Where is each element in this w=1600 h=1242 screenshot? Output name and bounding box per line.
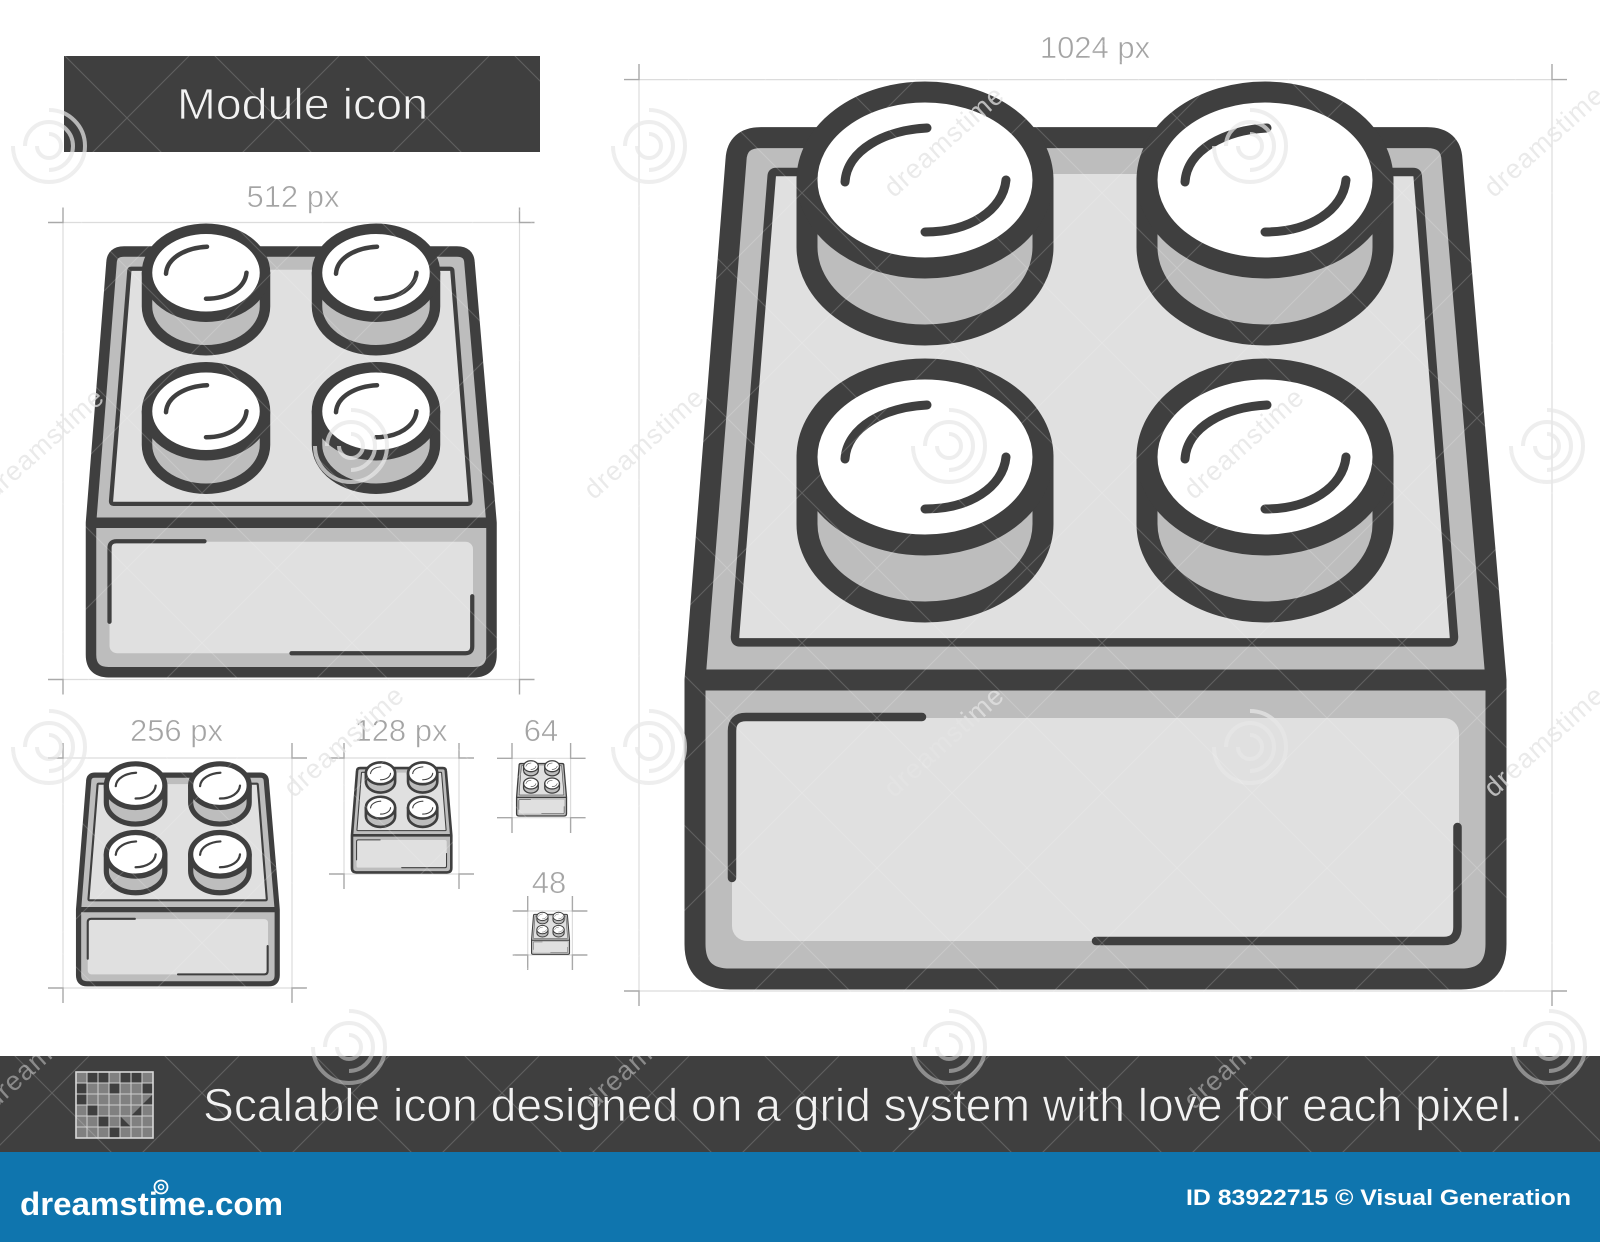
size label: 1024 px: 1024 px [1040, 30, 1151, 65]
guides: 128 px frame [329, 743, 474, 889]
guides: 512 px frame [48, 208, 534, 694]
title banner: Module icon [177, 80, 428, 129]
footer band [0, 1152, 1600, 1242]
title banner [64, 56, 540, 152]
size label: 64: 64 [524, 713, 558, 748]
guides: 1024 px frame [624, 64, 1567, 1006]
icon: pixel grid [76, 1072, 153, 1138]
footer credit: ID 83922715 © Visual Generation [1186, 1185, 1571, 1210]
caption text: Scalable icon designed on a grid system with love for each pixel. [203, 1079, 1523, 1131]
watermark spirals [13, 110, 1585, 1083]
caption bar [0, 1056, 1600, 1152]
size label: 128 px: 128 px [354, 713, 448, 748]
watermark text [0, 80, 1600, 803]
size label: 48: 48 [532, 865, 566, 900]
icon: module brick 1024 px [695, 92, 1496, 979]
guides: 48 px frame [513, 896, 587, 970]
watermark text: dreamstime [578, 382, 710, 505]
caption bar: dreamstime [1178, 992, 1310, 1115]
icon: module brick 48 px [532, 912, 570, 954]
guides: 256 px frame [48, 743, 307, 1003]
size label: 256 px: 256 px [130, 713, 224, 748]
caption bar: dreamstime [578, 992, 710, 1115]
guides: 64 px frame [497, 743, 586, 833]
size label: 512 px: 512 px [246, 179, 340, 214]
icon: module brick 512 px [91, 229, 492, 672]
icon: module brick 256 px [79, 764, 277, 984]
watermark text: dreamstime [878, 680, 1010, 803]
icon: module brick 64 px [517, 761, 567, 816]
watermark text: dreamstime [1178, 382, 1310, 505]
watermark text: dreamstime [278, 680, 410, 803]
icon: module brick 128 px [352, 762, 451, 872]
watermark text: dreamstime [878, 80, 1010, 203]
footer logo: dreamstime.com: dreamstime.com [20, 1186, 283, 1222]
